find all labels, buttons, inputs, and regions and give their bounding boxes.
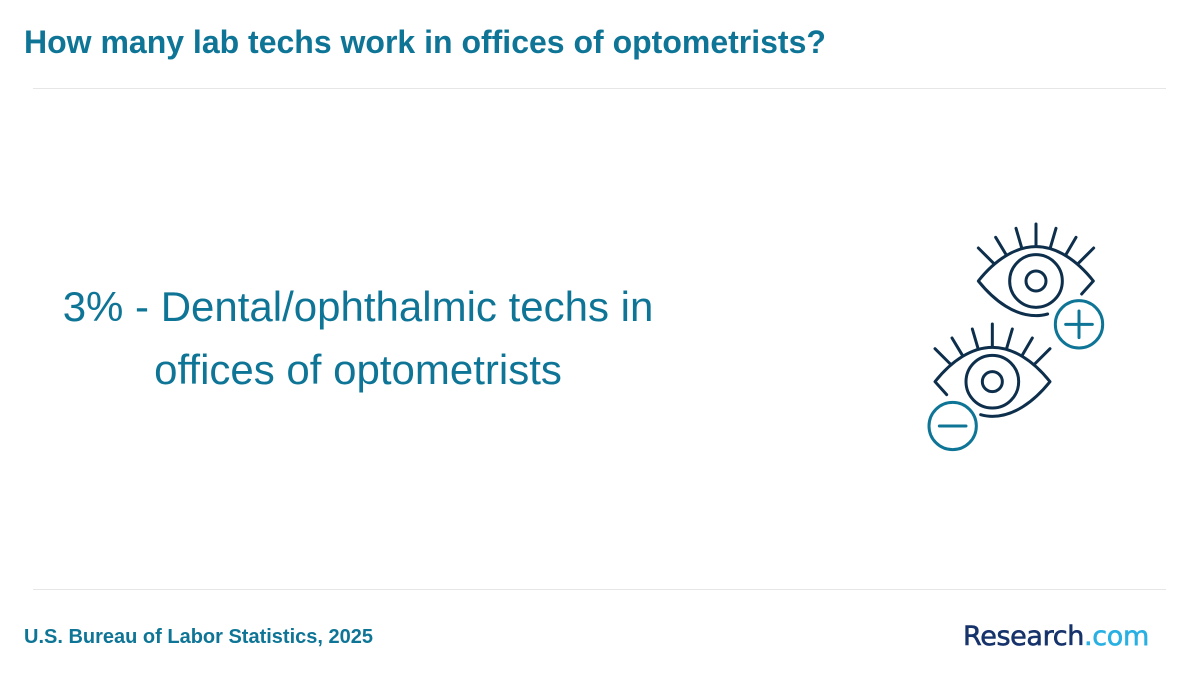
icon: two eyes with plus and minus [928,222,1104,452]
title: How many lab techs work in offices of optometrists? [24,24,826,60]
main statement text: offices of optometrists [154,346,562,393]
icon: lower eye [935,324,1050,416]
icon: plus badge [1055,301,1103,348]
logo: Research.com: Research.com [963,621,1149,652]
source text: U.S. Bureau of Labor Statistics, 2025 [24,626,373,648]
icon: upper eye [978,224,1094,316]
main statement text: 3% - Dental/ophthalmic techs in [63,283,653,330]
main statement text [63,283,653,393]
icon: minus badge [929,402,976,450]
